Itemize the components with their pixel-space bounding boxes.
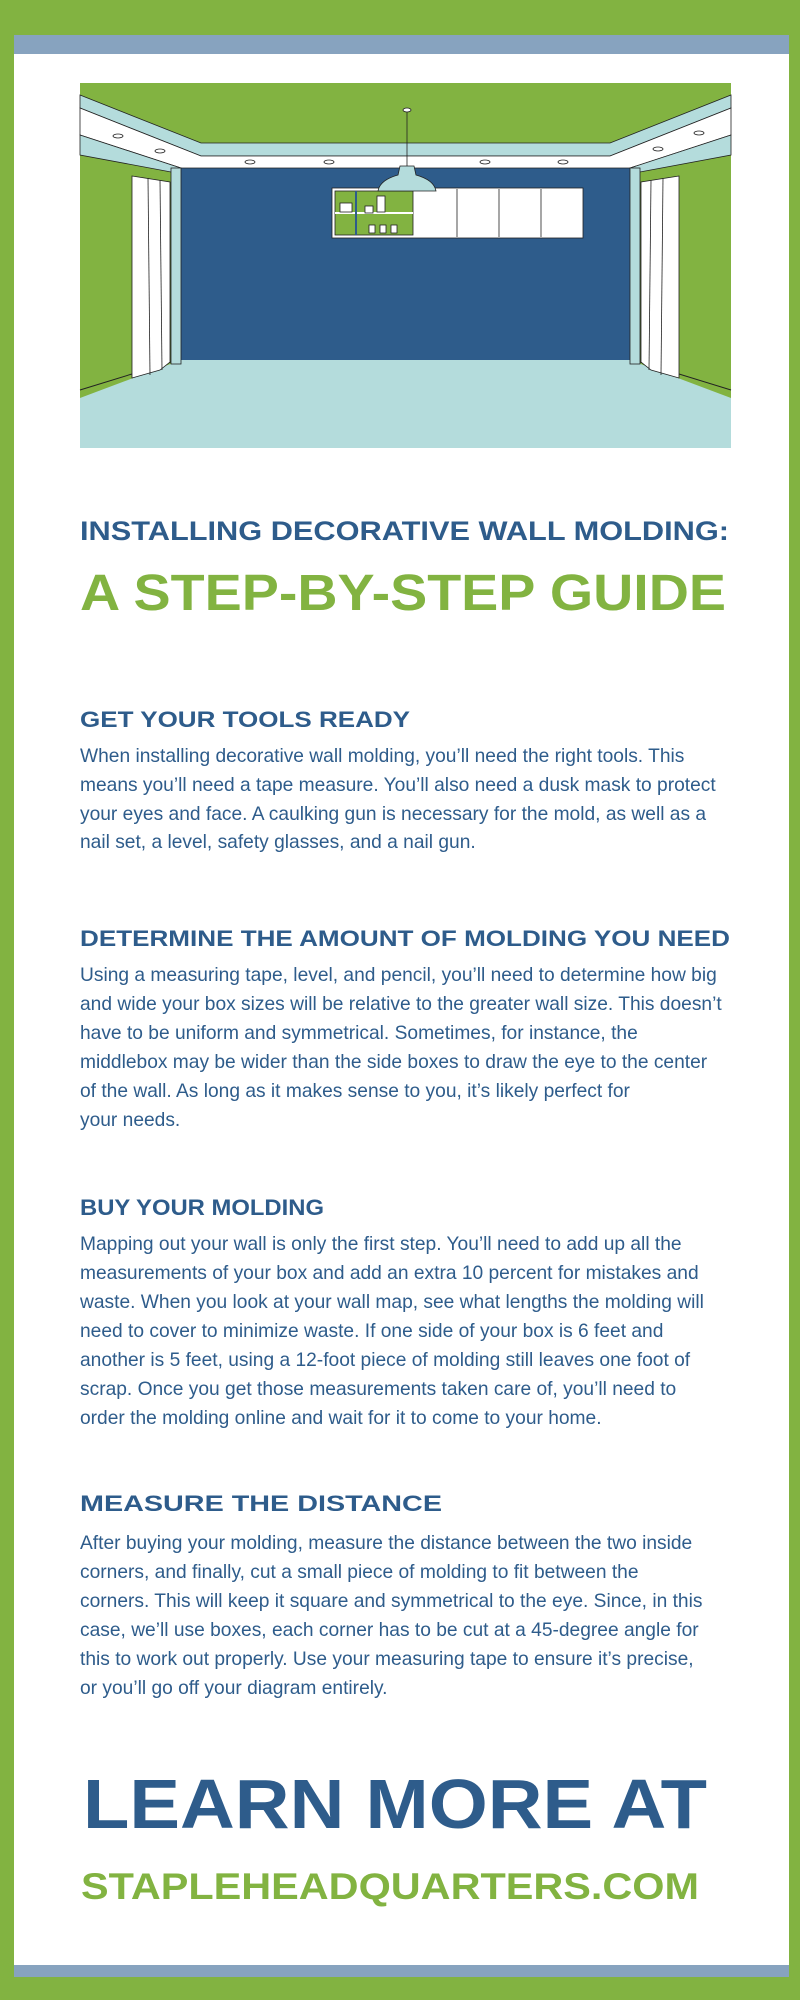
- section: buy your molding: scrap. Once you get those measurements taken care of, you’ll need to: [80, 1379, 676, 1400]
- section: measure the distance: After buying your molding, measure the distance between the two inside: [80, 1533, 692, 1554]
- section: buy your molding: need to cover to minimize waste. If one side of your box is 6 feet and: [80, 1321, 663, 1342]
- section: determine the amount: have to be uniform and symmetrical. Sometimes, for instance, the: [80, 1023, 638, 1044]
- section: get your tools ready: your eyes and face. A caulking gun is necessary for the mold, as well as a: [80, 804, 706, 825]
- icon: pendant lamp: [378, 108, 436, 191]
- section: get your tools ready: GET YOUR TOOLS READY: [80, 707, 410, 732]
- section: measure the distance: corners, and finally, cut a small piece of molding to fit between the: [80, 1562, 639, 1583]
- section: measure the distance: this to work out properly. Use your measuring tape to ensure it’s precise,: [80, 1649, 694, 1670]
- section: buy your molding: [79, 1195, 704, 1429]
- section: measure the distance: [80, 1491, 702, 1699]
- section: determine the amount: [80, 926, 730, 1131]
- section: measure the distance: corners. This will keep it square and symmetrical to the eye. Since, in this: [80, 1591, 702, 1612]
- website url: STAPLEHEADQUARTERS.COM: [81, 1866, 699, 1907]
- call to action heading: LEARN MORE AT: [83, 1765, 707, 1843]
- section: get your tools ready: When installing decorative wall molding, you’ll need the right tools. This: [80, 746, 684, 767]
- cabinet: [332, 188, 583, 238]
- section: buy your molding: waste. When you look at your wall map, see what lengths the molding will: [79, 1292, 704, 1313]
- section: buy your molding: Mapping out your wall is only the first step. You’ll need to add up all the: [80, 1234, 682, 1255]
- top bar: [14, 35, 789, 54]
- section: determine the amount: Using a measuring tape, level, and pencil, you’ll need to determine how big: [80, 965, 717, 986]
- section: determine the amount: and wide your box sizes will be relative to the greater wall size. This doesn’t: [80, 994, 722, 1015]
- section: get your tools ready: means you’ll need a tape measure. You’ll also need a dusk mask to protect: [80, 775, 716, 796]
- section: determine the amount: of the wall. As long as it makes sense to you, it’s likely perfect for: [80, 1081, 631, 1102]
- section: get your tools ready: nail set, a level, safety glasses, and a nail gun.: [80, 832, 476, 853]
- title line 2: A STEP-BY-STEP GUIDE: [80, 564, 726, 621]
- section: measure the distance: MEASURE THE DISTANCE: [80, 1491, 442, 1516]
- section: measure the distance: or you’ll go off your diagram entirely.: [80, 1678, 388, 1699]
- curtains: [132, 176, 679, 378]
- section: determine the amount: your needs.: [80, 1110, 180, 1131]
- section: buy your molding: measurements of your box and add an extra 10 percent for mistakes and: [80, 1263, 699, 1284]
- section: get your tools ready: [80, 707, 716, 853]
- title line 1: INSTALLING DECORATIVE WALL MOLDING:: [80, 516, 729, 546]
- section: buy your molding: BUY YOUR MOLDING: [80, 1195, 324, 1220]
- section: determine the amount: DETERMINE THE AMOUNT OF MOLDING YOU NEED: [80, 926, 730, 951]
- section: buy your molding: another is 5 feet, using a 12-foot piece of molding still leaves one foot of: [80, 1350, 691, 1371]
- back wall: [181, 168, 630, 360]
- section: measure the distance: case, we’ll use boxes, each corner has to be cut at a 45-degree angle for: [80, 1620, 699, 1641]
- ceiling molding: [80, 95, 731, 364]
- bottom bar: [14, 1965, 789, 1977]
- section: determine the amount: middlebox may be wider than the side boxes to draw the eye to the center: [80, 1052, 708, 1073]
- section: buy your molding: order the molding online and wait for it to come to your home.: [80, 1408, 602, 1429]
- floor: [80, 360, 731, 448]
- illustration: room: [80, 83, 731, 448]
